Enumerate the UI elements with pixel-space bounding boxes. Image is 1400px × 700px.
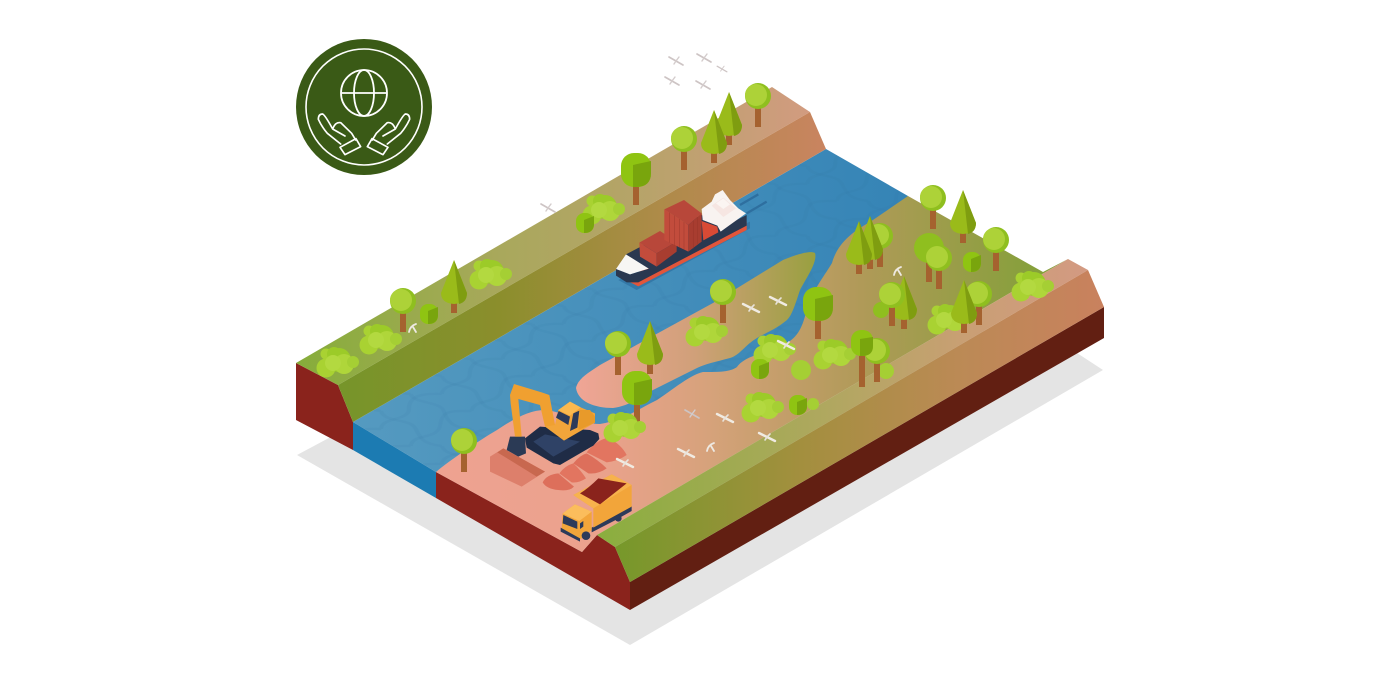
soil load (580, 478, 627, 504)
truck cab (562, 504, 592, 539)
container ship (616, 190, 767, 290)
tracks (525, 427, 599, 465)
windshield (563, 515, 577, 529)
front red soil face, right part (436, 472, 630, 610)
river (353, 149, 908, 472)
cab windows (556, 411, 570, 425)
logo badge: hands holding globe (296, 39, 432, 175)
front red soil face, left bank (296, 363, 353, 450)
small container stack (639, 231, 677, 267)
chassis and wheels (592, 506, 632, 532)
dump truck (561, 474, 632, 542)
excavation pit and soil mounds (490, 438, 627, 490)
wake (740, 194, 767, 213)
right bank slope (615, 270, 1104, 582)
excavator (507, 384, 599, 465)
right dark side face (630, 307, 1104, 610)
tall container stack (664, 200, 702, 252)
white superstructure (702, 190, 746, 232)
icon: globe (341, 70, 387, 116)
boom arm (510, 384, 556, 437)
trees: back bank (316, 83, 771, 378)
lower land with excavation site and forest (436, 196, 1068, 552)
dark deck (626, 215, 723, 269)
icon: caring hands (318, 114, 410, 155)
left bank slope (338, 112, 826, 422)
white bow (616, 254, 649, 274)
bucket (507, 437, 526, 457)
dark hull (616, 215, 747, 282)
hull shadow (618, 222, 750, 290)
terrain block (296, 87, 1104, 610)
red waterline (623, 222, 747, 286)
trees: forest (742, 185, 1054, 422)
dump bed (573, 474, 632, 528)
birds (409, 54, 901, 467)
left bank top (296, 87, 810, 385)
trees: island and shoreline (451, 279, 736, 472)
grille bumper (561, 528, 580, 542)
red container by bridge (702, 221, 718, 240)
ground shadow (297, 300, 1103, 645)
front blue water face (353, 422, 436, 498)
island (576, 252, 815, 408)
right bank top (597, 259, 1088, 547)
cab body (545, 402, 595, 441)
